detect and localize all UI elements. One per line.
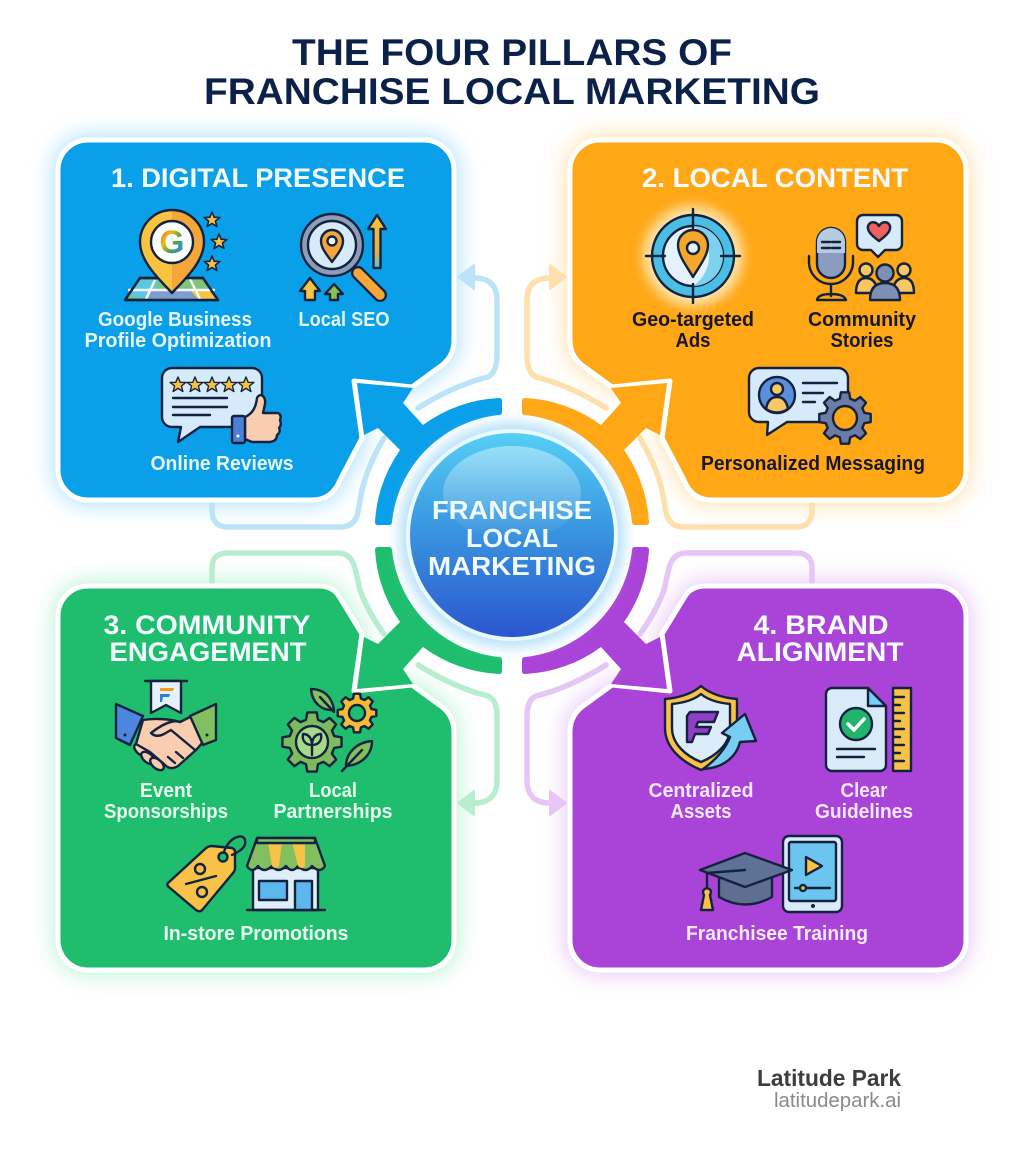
footer brand xyxy=(757,1065,901,1112)
connector: purple loop xyxy=(527,553,812,815)
icon: community stories xyxy=(809,215,914,300)
icon: geo-targeted target xyxy=(643,206,743,306)
footer brand: Latitude Park xyxy=(757,1065,901,1091)
label: google business profile optimization xyxy=(84,309,272,352)
label: personalized messaging: Personalized Messaging xyxy=(701,453,925,475)
title xyxy=(204,32,820,112)
arrow: purple arc xyxy=(522,547,667,689)
icon: personalized messaging xyxy=(749,368,871,444)
icon: google business pin on map: G xyxy=(160,224,184,260)
label: event sponsorships: Sponsorships xyxy=(104,801,228,823)
heading: local content: 2. LOCAL CONTENT xyxy=(642,163,909,193)
label: local partnerships: Partnerships xyxy=(274,801,392,823)
label: centralized assets: Assets xyxy=(670,801,732,823)
central hub: FRANCHISE xyxy=(432,495,592,525)
title: THE FOUR PILLARS OF xyxy=(292,32,732,73)
heading: brand alignment: 4. BRAND xyxy=(754,610,888,640)
central hub: LOCAL xyxy=(466,523,558,553)
footer brand: latitudepark.ai xyxy=(774,1090,901,1112)
label: centralized assets xyxy=(648,780,754,823)
label: community stories: Stories xyxy=(830,330,894,352)
panel: local content xyxy=(570,140,966,500)
heading: community engagement: 3. COMMUNITY xyxy=(104,610,310,640)
label: community stories: Community xyxy=(808,309,917,331)
label: google business profile optimization: Google Business xyxy=(98,309,252,331)
label: geo-targeted ads: Ads xyxy=(676,330,710,352)
panel glow: brand alignment xyxy=(570,586,966,970)
icon: local seo magnifier xyxy=(300,214,386,300)
connector: orange loop xyxy=(527,265,812,527)
label: clear guidelines: Guidelines xyxy=(815,801,913,823)
panel: brand alignment xyxy=(570,586,966,970)
label: local partnerships: Local xyxy=(309,780,357,802)
label: in-store promotions: In-store Promotions xyxy=(164,923,348,945)
panel: digital presence xyxy=(58,140,454,500)
panel glow: digital presence xyxy=(58,140,454,500)
icon: online reviews xyxy=(162,368,281,443)
label: geo-targeted ads: Geo-targeted xyxy=(632,309,754,331)
heading: brand alignment xyxy=(736,610,904,667)
heading: community engagement: ENGAGEMENT xyxy=(110,637,307,667)
panel glow: community engagement xyxy=(58,586,454,970)
label: clear guidelines: Clear xyxy=(840,780,888,802)
panel: community engagement xyxy=(58,586,454,970)
icon: clear guidelines document xyxy=(826,688,911,771)
icon: event sponsorship handshake xyxy=(116,681,216,773)
icon: franchisee training xyxy=(700,836,842,912)
heading: brand alignment: ALIGNMENT xyxy=(736,637,904,667)
icon: in-store promotions xyxy=(167,836,325,911)
label: online reviews: Online Reviews xyxy=(150,453,294,475)
label: event sponsorships: Event xyxy=(140,780,192,802)
arrow: orange arc xyxy=(522,383,667,525)
connector: green loop xyxy=(212,553,497,815)
label: google business profile optimization: Profile Optimization xyxy=(84,330,272,352)
heading: community engagement xyxy=(104,610,310,667)
label: local partnerships xyxy=(274,780,392,823)
arrow: green arc xyxy=(357,547,502,689)
label: centralized assets: Centralized xyxy=(648,780,754,802)
label: franchisee training: Franchisee Training xyxy=(686,923,868,945)
title: FRANCHISE LOCAL MARKETING xyxy=(204,71,820,112)
central hub: MARKETING xyxy=(428,551,596,581)
label: local seo: Local SEO xyxy=(298,309,390,331)
label: event sponsorships xyxy=(104,780,228,823)
label: geo-targeted ads xyxy=(632,309,754,352)
icon: local partnerships gears xyxy=(282,689,376,772)
label: clear guidelines xyxy=(815,780,913,823)
heading: digital presence: 1. DIGITAL PRESENCE xyxy=(111,163,405,193)
icon: google business pin on map xyxy=(125,210,227,300)
central hub xyxy=(399,422,625,648)
icon: centralized assets shield xyxy=(665,686,756,770)
label: community stories xyxy=(808,309,917,352)
panel glow: local content xyxy=(570,140,966,500)
connector: blue loop xyxy=(212,265,497,527)
arrow: blue arc xyxy=(357,383,502,525)
